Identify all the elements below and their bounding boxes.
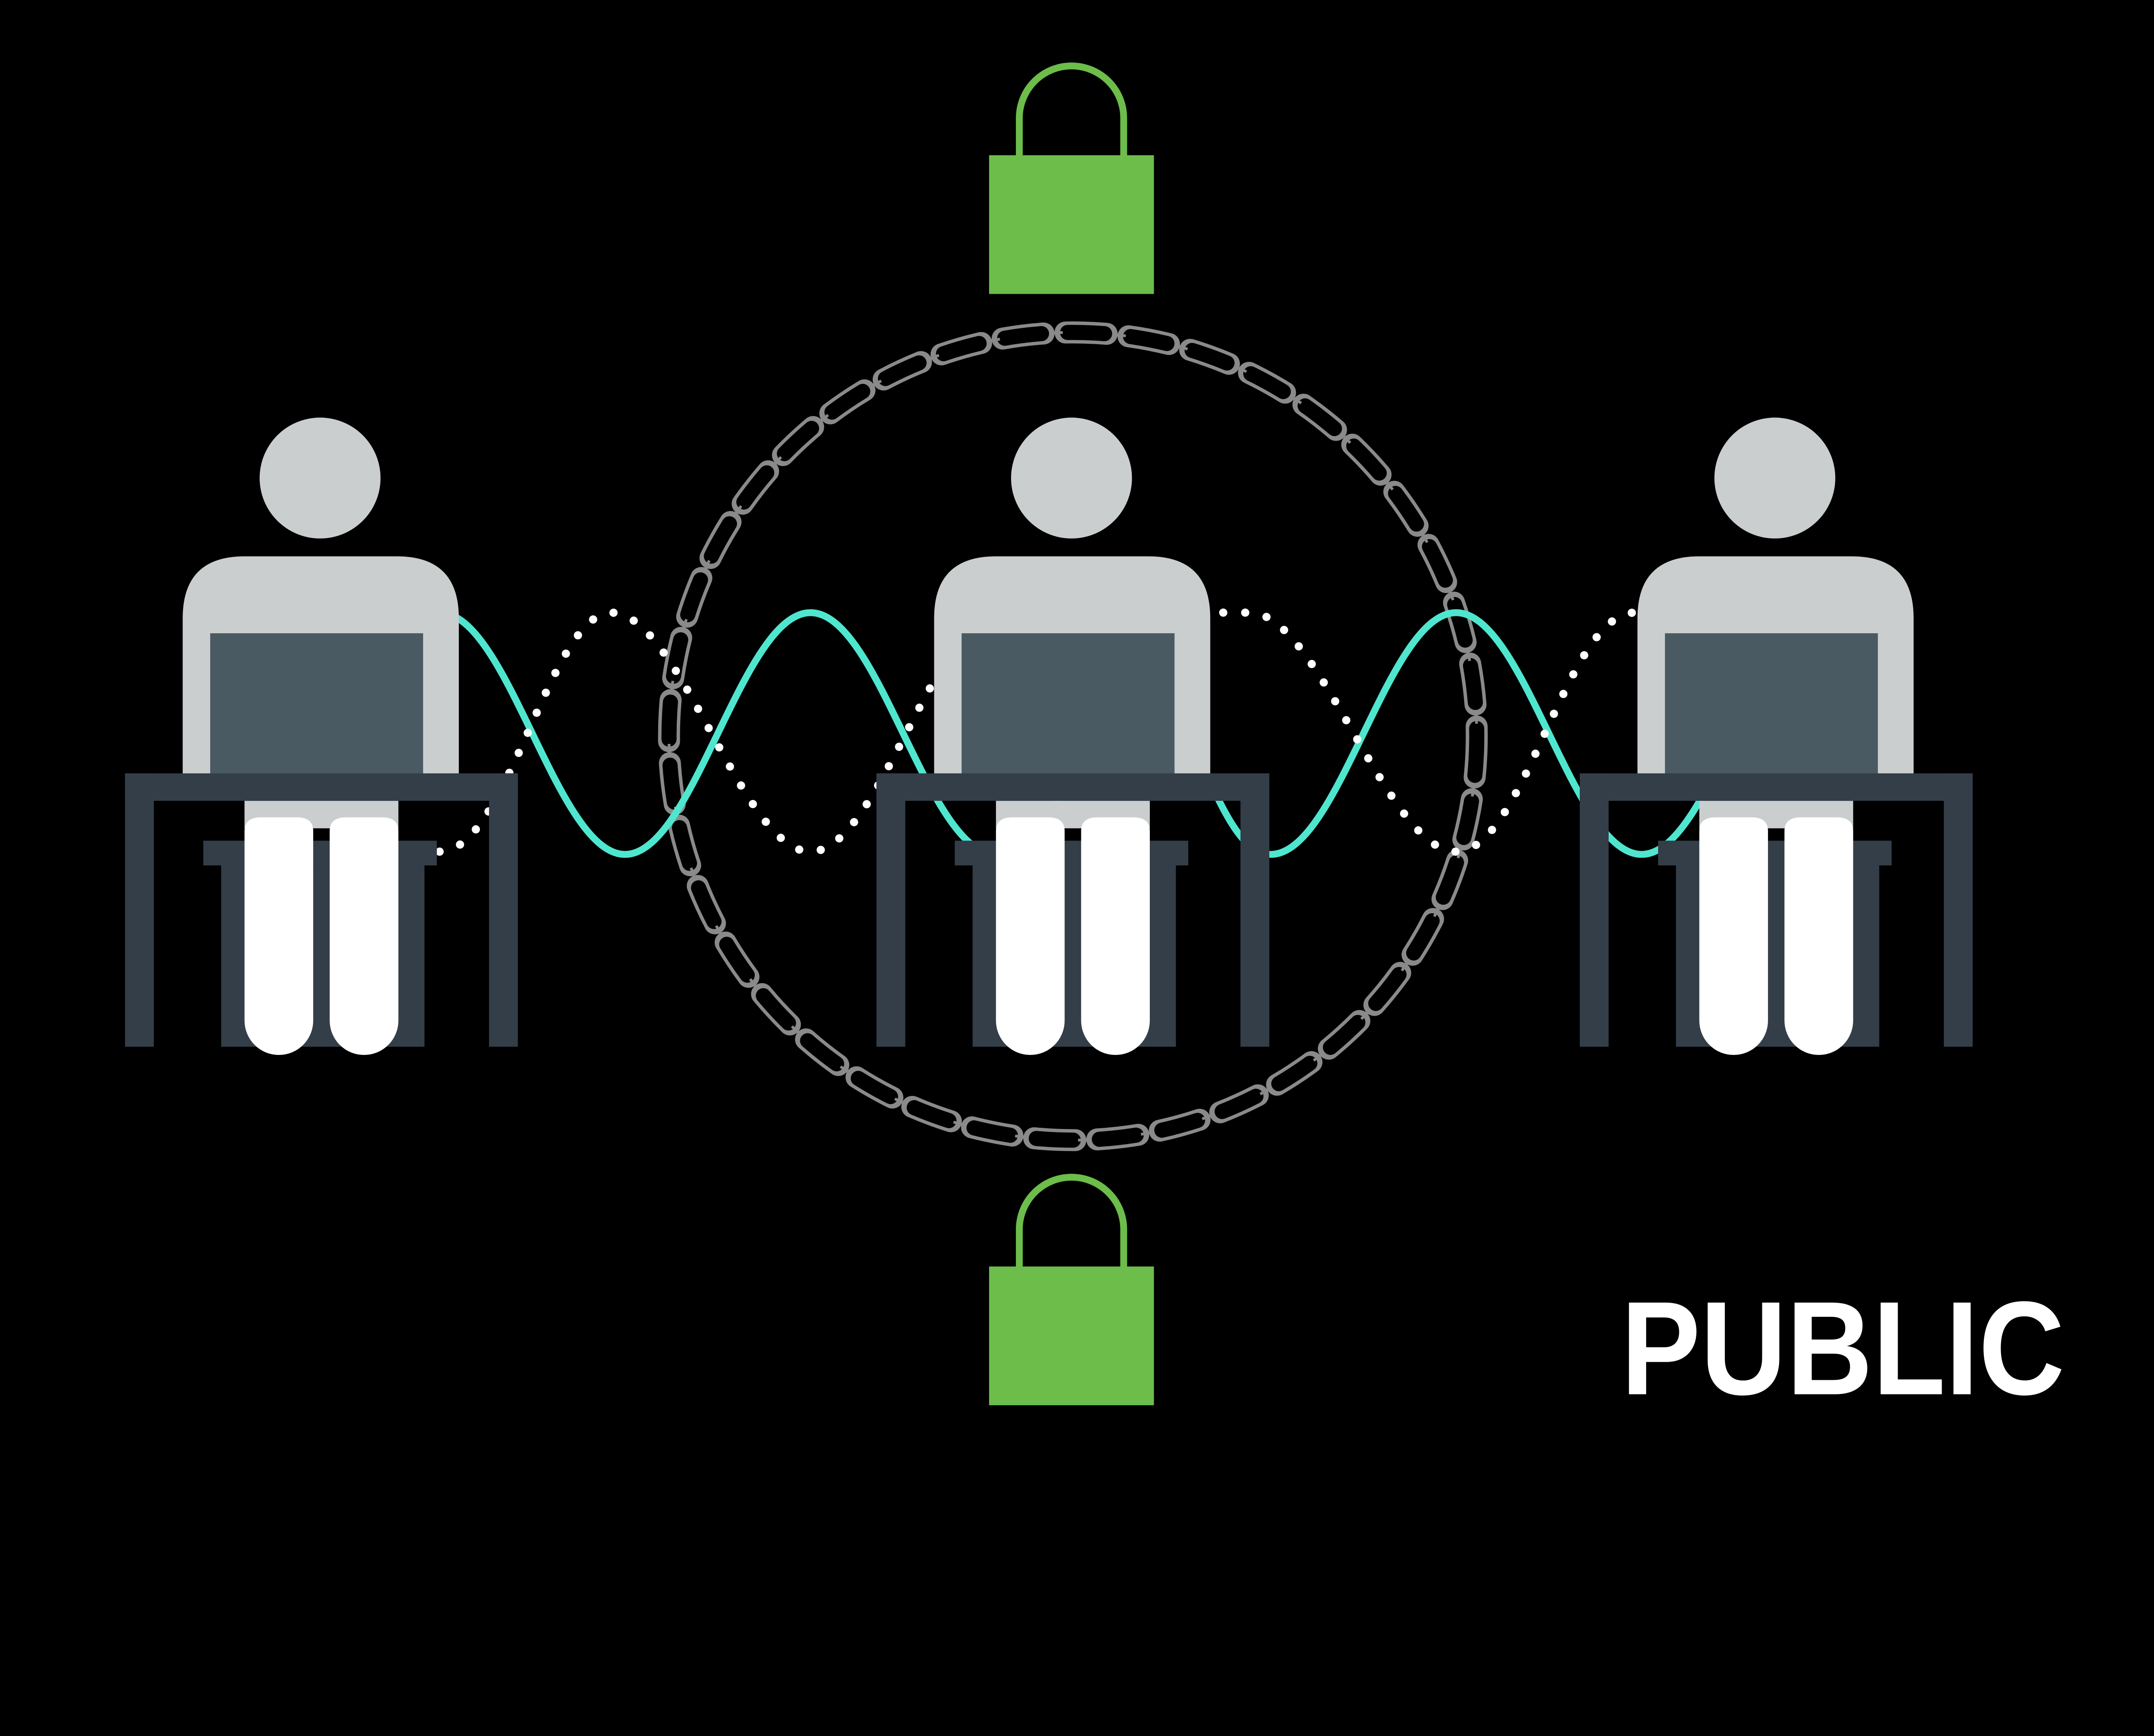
icon: padlock bottom: [989, 1177, 1154, 1405]
person 2: [876, 417, 1269, 1055]
person 1: [125, 417, 518, 1055]
icon: padlock top: [989, 66, 1154, 294]
chain circle: [669, 333, 1477, 1140]
wave: dotted white: [439, 613, 1635, 852]
person 3: [1580, 417, 1973, 1055]
label: PUBLIC: PUBLIC: [1621, 1274, 2065, 1423]
wave: cyan: [439, 613, 1827, 854]
